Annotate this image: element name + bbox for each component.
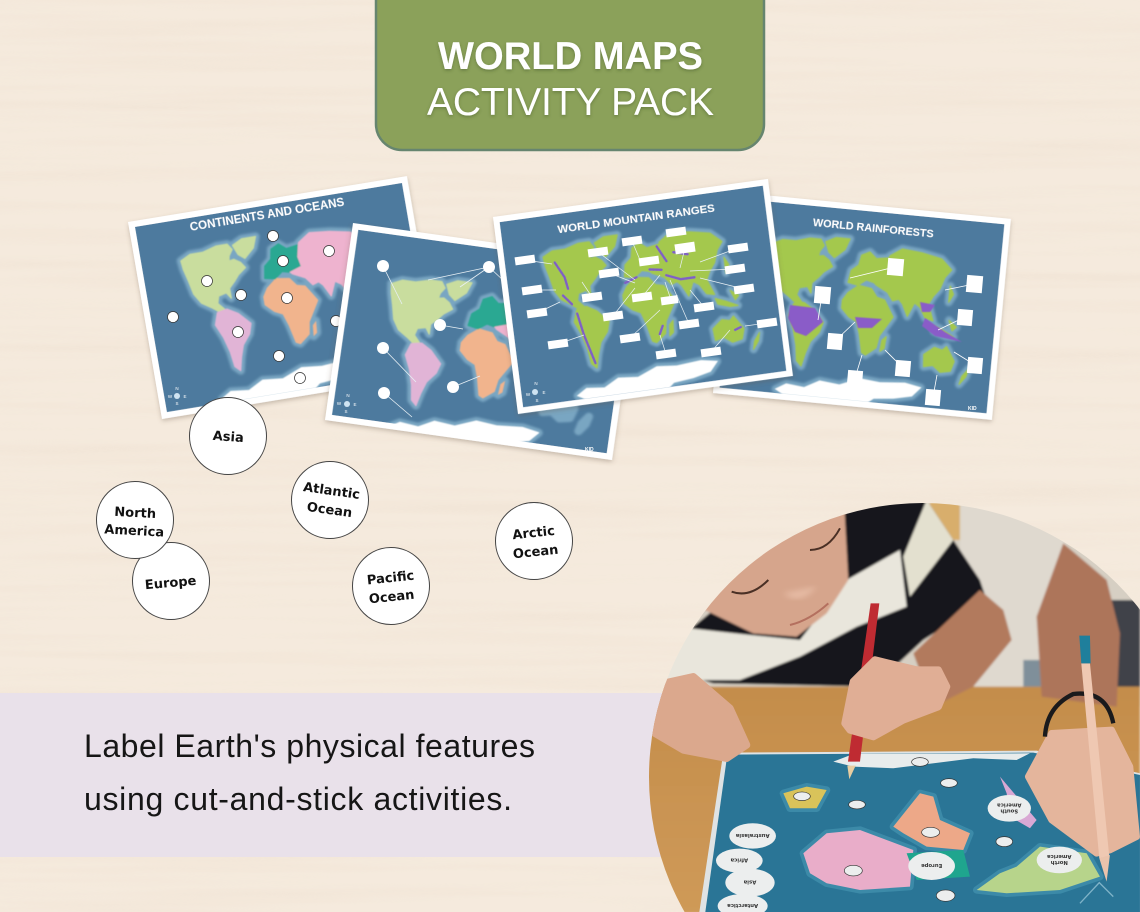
card title: WORLD MOUNTAIN RANGES bbox=[557, 202, 716, 236]
pink pencil bbox=[1079, 636, 1110, 882]
cut-out label: Arctic Ocean: Arctic bbox=[512, 524, 556, 543]
compass: N bbox=[175, 386, 179, 391]
title line one: WORLD MAPS bbox=[438, 35, 703, 78]
blurred scene behind the sheet bbox=[640, 500, 1140, 912]
compass: E bbox=[353, 402, 357, 407]
sticker: Antarctica bbox=[718, 894, 768, 912]
card title: WORLD RAINFORESTS bbox=[812, 217, 934, 241]
cut-out label: North America bbox=[96, 482, 174, 558]
brand mark: KID bbox=[968, 406, 977, 412]
compass: S bbox=[175, 401, 179, 406]
compass bbox=[168, 386, 187, 406]
red pencil bbox=[847, 603, 879, 779]
map card: continents and oceans bbox=[128, 176, 441, 419]
sticker: South America: America bbox=[997, 801, 1022, 807]
cut-out label: Atlantic Ocean: Ocean bbox=[306, 500, 353, 521]
map sheet bbox=[699, 751, 1140, 912]
shirt bbox=[660, 500, 987, 687]
sticker: Europe: Europe bbox=[921, 862, 942, 868]
cut-out label: North America: America bbox=[104, 522, 164, 541]
sticker: South America: South bbox=[1000, 807, 1018, 813]
sticker: South America bbox=[988, 795, 1031, 822]
arm: right bbox=[1037, 543, 1120, 707]
cut-out label: Arctic Ocean bbox=[496, 502, 572, 580]
table bbox=[640, 687, 1140, 912]
photo: child labelling a map bbox=[640, 500, 1140, 912]
compass: S bbox=[535, 398, 539, 403]
card title: CONTINENTS AND OCEANS bbox=[189, 197, 346, 234]
caption band: using cut-and-stick activities. bbox=[84, 781, 512, 817]
compass: S bbox=[344, 409, 348, 414]
sticker: Europe bbox=[908, 852, 955, 880]
sticker: Australasia: Australasia bbox=[735, 832, 770, 838]
title line two: ACTIVITY PACK bbox=[427, 81, 714, 124]
compass: N bbox=[346, 393, 350, 398]
sticker: Africa: Africa bbox=[730, 857, 748, 863]
compass: E bbox=[542, 390, 546, 395]
map card: world mountain ranges bbox=[493, 179, 793, 414]
cut-out label: Pacific Ocean bbox=[352, 548, 430, 624]
left hand bbox=[655, 677, 747, 758]
compass bbox=[526, 381, 546, 403]
centre hand bbox=[845, 660, 947, 737]
cut-out label: Europe: Europe bbox=[144, 574, 197, 593]
room background bbox=[694, 540, 1133, 688]
facial features bbox=[732, 528, 840, 625]
right hand bbox=[1028, 730, 1137, 853]
brand mark: KID bbox=[771, 373, 780, 379]
cut-out label: Atlantic Ocean: Atlantic bbox=[302, 480, 361, 503]
sticker: Antarctica: Antarctica bbox=[727, 902, 758, 908]
caption band bbox=[0, 693, 680, 857]
cut-out label: North America: North bbox=[114, 505, 156, 522]
cut-out label: Atlantic Ocean bbox=[292, 462, 368, 538]
sticker: North America: America bbox=[1047, 853, 1072, 859]
label lines bbox=[525, 241, 767, 354]
blank dots bbox=[794, 758, 1013, 901]
cut-out label: Arctic Ocean: Ocean bbox=[512, 543, 559, 562]
cut-out label: Asia bbox=[190, 398, 266, 474]
compass: W bbox=[168, 394, 173, 399]
mountain ranges bbox=[554, 236, 743, 367]
cut-out label: Asia: Asia bbox=[212, 429, 244, 446]
compass: N bbox=[534, 381, 538, 386]
compass: W bbox=[337, 401, 342, 406]
brand mark: KID bbox=[585, 447, 594, 453]
label boxes bbox=[515, 227, 777, 359]
header banner bbox=[376, 0, 764, 150]
cut-out label: Pacific Ocean: Pacific bbox=[366, 569, 415, 588]
cut-out label: Pacific Ocean: Ocean bbox=[368, 588, 415, 607]
label boxes bbox=[814, 258, 983, 406]
compass: E bbox=[183, 394, 187, 399]
sticker: Asia: Asia bbox=[743, 879, 756, 885]
compass: W bbox=[526, 392, 531, 397]
label lines bbox=[383, 266, 505, 417]
rainforest areas bbox=[788, 302, 962, 342]
face bbox=[705, 514, 850, 638]
cut-out label: Europe bbox=[132, 542, 210, 620]
sticker: North America: North bbox=[1051, 859, 1068, 865]
sticker: North America bbox=[1037, 847, 1082, 873]
map card: blank labelled continents bbox=[324, 223, 640, 468]
sticker: Australasia bbox=[729, 823, 776, 849]
label dots bbox=[168, 230, 342, 384]
sticker: Asia bbox=[725, 869, 775, 897]
label dots bbox=[377, 260, 495, 399]
caption text: Label Earth's physical features bbox=[84, 728, 535, 764]
forearm: child bbox=[913, 590, 1012, 707]
compass bbox=[337, 393, 357, 414]
bracelet bbox=[1045, 694, 1113, 737]
map card: world rainforests bbox=[713, 192, 1011, 420]
sticker: Africa bbox=[716, 849, 763, 873]
